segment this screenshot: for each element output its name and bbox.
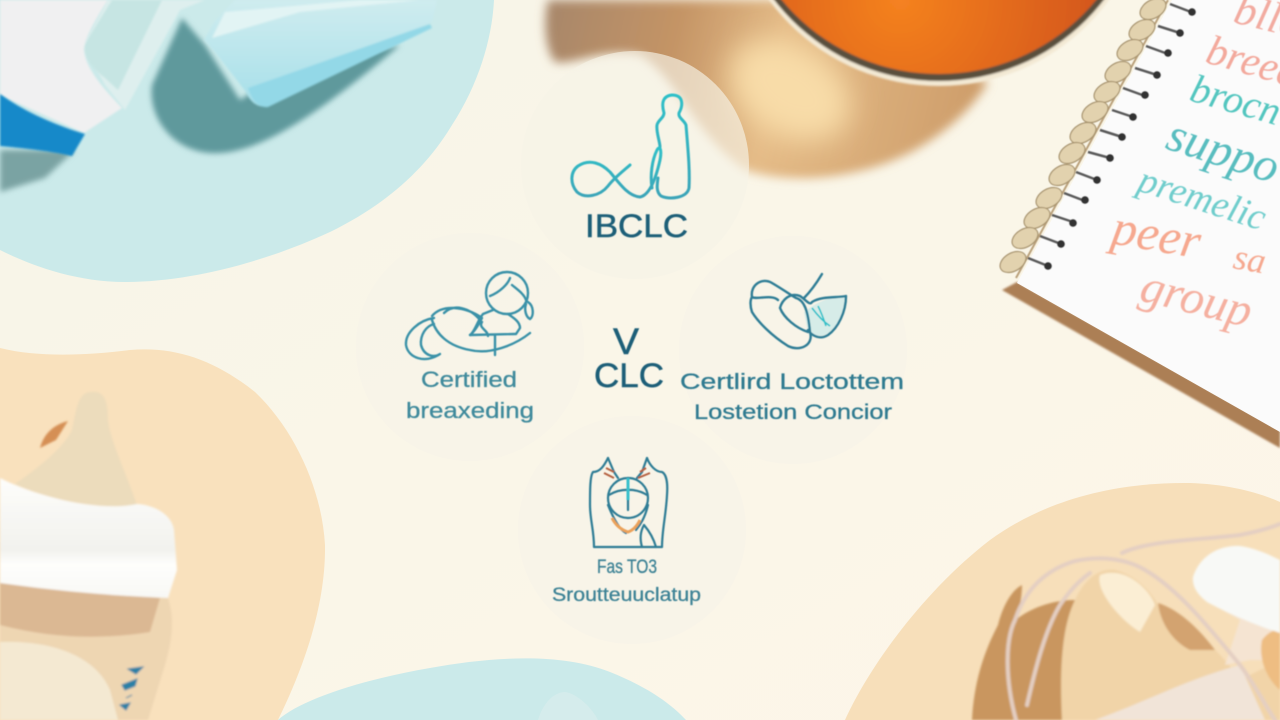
notebook page [1017, 0, 1280, 432]
label: Certlird Loctottem Lostetion Concior: Certlird Loctottem [680, 369, 904, 394]
bottle body [0, 580, 172, 720]
measure marks [120, 667, 143, 710]
label: Fas TO3 Sroutteuuclatup: Fas TO3 [597, 557, 657, 578]
pump shadow [972, 585, 1075, 720]
panel: certified lactation consultant circle [679, 236, 907, 464]
baby bottle [0, 392, 177, 720]
nipple shadow [40, 421, 68, 448]
handwritten notes: premelic [1130, 158, 1271, 239]
label: Certlird Loctottem Lostetion Concior [680, 369, 904, 424]
translucent flange [1095, 665, 1265, 720]
panel: bowl and cast shadow [545, 0, 1150, 178]
pale panel behind bottle [84, 0, 162, 90]
handwritten notes: sa [1231, 236, 1269, 281]
blue bottle band [0, 94, 85, 156]
milk [0, 642, 118, 720]
panel: teal blob bottom [278, 658, 686, 720]
center label: V CLC: V [613, 321, 639, 362]
pale strip behind bottle [84, 0, 205, 110]
panel: peer support circle [518, 416, 746, 644]
bowl [728, 0, 1150, 86]
label: Certified breaxeding: Certified [421, 367, 517, 392]
panel: peach blob with breast pump [845, 483, 1280, 720]
handwritten notes: group [1135, 259, 1258, 338]
breast shield [1061, 570, 1280, 720]
white cap [0, 478, 177, 598]
blue bottle cap [204, 0, 437, 107]
panel: peach blob with bottle [0, 348, 325, 720]
cast shadow [545, 0, 988, 178]
shadow under bottle cap [152, 18, 400, 153]
label: Fas TO3 Sroutteuuclatup [552, 557, 701, 606]
breast pump [972, 524, 1280, 720]
label: Certified breaxeding [406, 367, 534, 423]
icon: mother and baby [406, 272, 533, 359]
small nipple [538, 692, 598, 720]
shadow under white bottle [0, 150, 75, 192]
spiral binding [996, 0, 1196, 278]
white bottle [0, 0, 122, 133]
label: IBCLC: IBCLC [585, 208, 688, 244]
panel: certified breastfeeding circle [356, 233, 584, 461]
icon: raised arms figure [590, 458, 667, 547]
handwritten notes: peer [1105, 198, 1206, 269]
panel: IBCLC circle [521, 51, 749, 279]
panel: notebook [996, 0, 1280, 448]
panel: teal blob with feeding bottles [0, 0, 494, 282]
label: Certified breaxeding: breaxeding [406, 398, 534, 423]
white capsule [1193, 546, 1280, 633]
shadow highlight [711, 19, 869, 161]
icon: breast and pillow [750, 274, 846, 348]
handwritten notes [1105, 0, 1280, 338]
notebook shadow [1002, 282, 1280, 448]
label: Certlird Loctottem Lostetion Concior: Lostetion Concior [694, 401, 892, 424]
nipple [15, 392, 137, 506]
icon: bottle and infinity loop [572, 95, 689, 198]
center label: V CLC [594, 321, 664, 395]
center label: V CLC: CLC [594, 357, 664, 395]
highlight [1099, 573, 1155, 632]
label: Fas TO3 Sroutteuuclatup: Sroutteuuclatup [552, 585, 701, 606]
tubes [1008, 524, 1280, 720]
